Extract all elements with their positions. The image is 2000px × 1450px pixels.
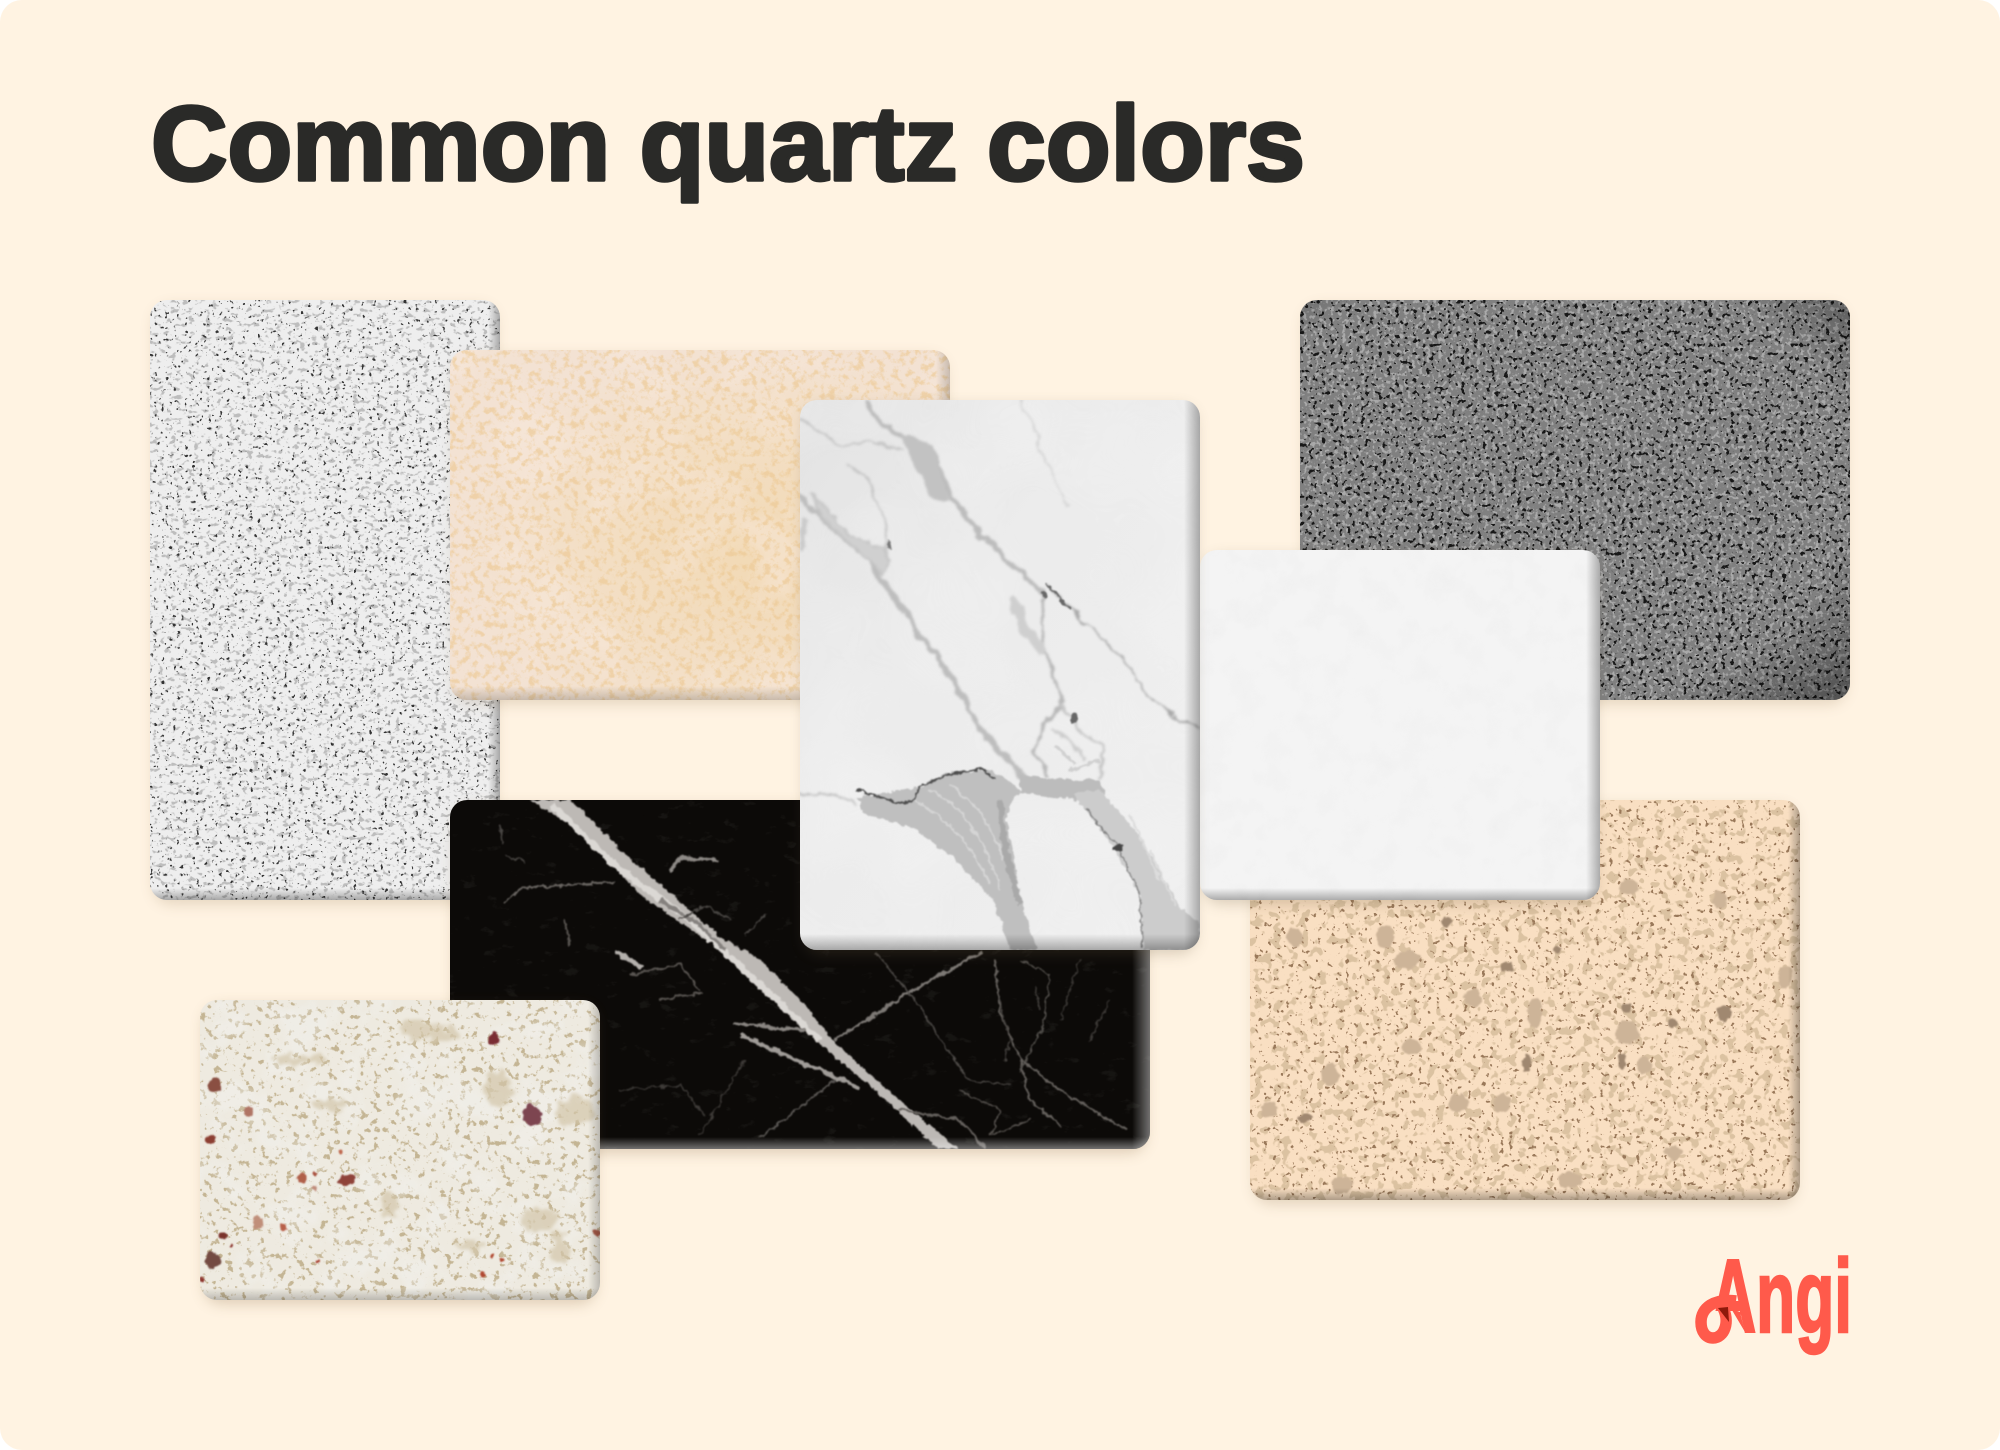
larger stones (1260, 879, 1792, 1194)
slab: black marble quartz (450, 800, 1150, 1153)
slab: dark gray granite quartz (1300, 300, 1850, 704)
main white vein (530, 800, 959, 1149)
dark cracks (858, 540, 1142, 948)
slab: white marble quartz with gray veins (800, 400, 1200, 954)
logo: Angi: Angi (1710, 1239, 1852, 1355)
thin veins (500, 825, 1125, 1148)
soft gray veins (800, 401, 1199, 805)
tan patches (272, 1019, 597, 1266)
slab: peach speckled quartz (1250, 800, 1800, 1204)
central vein delta (857, 745, 1200, 950)
red garnet spots (200, 1032, 601, 1282)
logo swash loop (1701, 1300, 1736, 1338)
title: Common quartz colors (151, 85, 1305, 203)
slab: plain white quartz (1200, 550, 1600, 904)
logo swash shadow (1718, 1307, 1729, 1322)
logo: Angi (1701, 1239, 1852, 1355)
slab: cream granite quartz (200, 1000, 601, 1304)
slab: beige quartz (450, 350, 950, 704)
slab: white speckled quartz (150, 300, 500, 904)
